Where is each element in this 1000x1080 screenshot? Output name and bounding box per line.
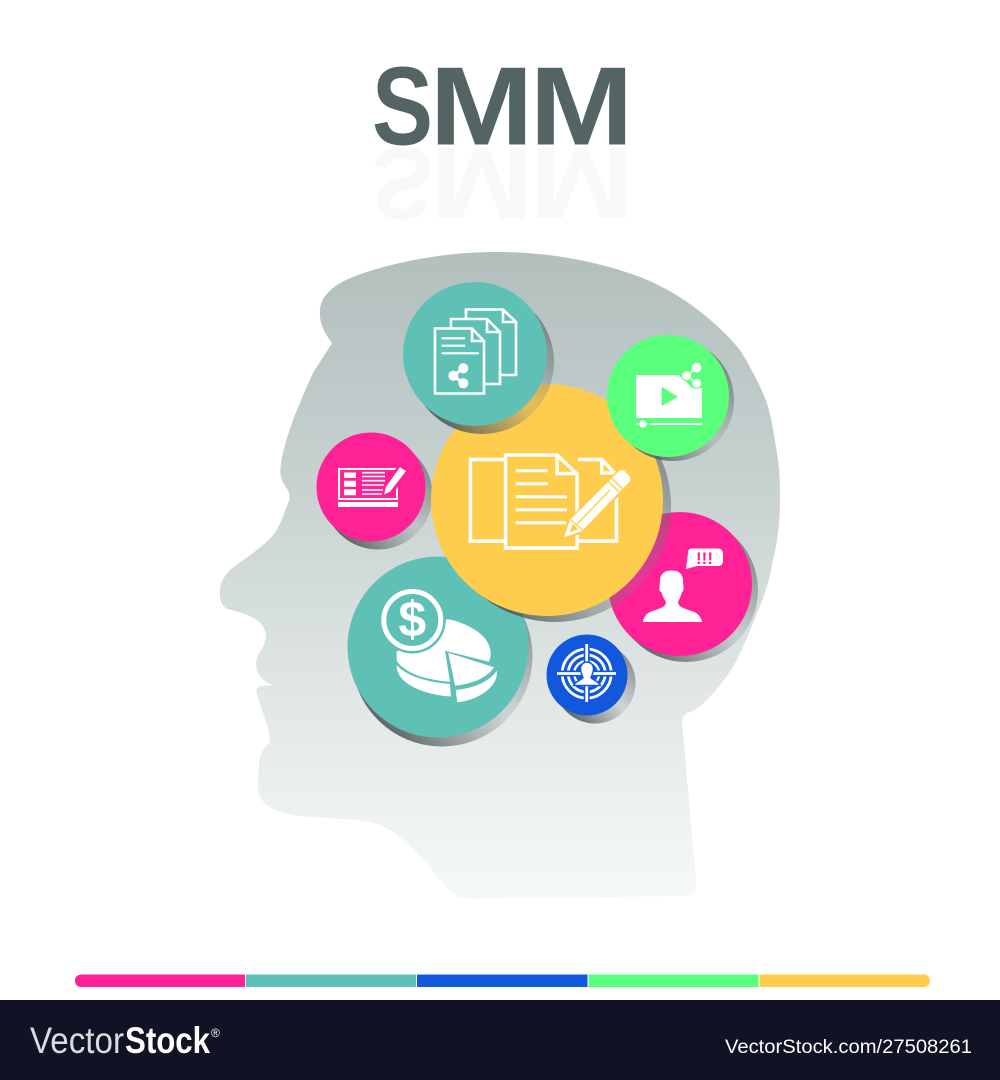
icon: shared documents bbox=[435, 310, 516, 394]
title: S bbox=[372, 44, 433, 168]
icon: laptop with pencil bbox=[338, 464, 410, 507]
circle: teal documents bbox=[403, 282, 554, 434]
circle: blue target bbox=[546, 634, 636, 724]
icon: coin and pie chart bbox=[379, 586, 497, 702]
icon: coin and pie chart: $ bbox=[398, 592, 426, 648]
title reflection: M bbox=[430, 125, 534, 241]
footer band bbox=[0, 1000, 1000, 1080]
icon: pencil bbox=[564, 470, 630, 537]
circle: pink editing bbox=[316, 432, 432, 550]
title: M bbox=[430, 44, 534, 168]
title bbox=[372, 44, 634, 168]
circle: green video bbox=[607, 335, 734, 461]
title reflection: S bbox=[372, 125, 433, 241]
title: M bbox=[530, 44, 634, 168]
head silhouette bbox=[220, 252, 780, 899]
footer logo: Vector bbox=[30, 1020, 124, 1061]
footer logo bbox=[30, 1020, 220, 1061]
circle: teal budget bbox=[348, 556, 532, 746]
footer url: VectorStock.com/27508261 bbox=[725, 1036, 972, 1058]
title reflection bbox=[372, 125, 634, 241]
icon: person with speech bubble: !!! bbox=[696, 549, 713, 568]
circle: pink speech bbox=[608, 512, 758, 662]
title reflection: M bbox=[530, 125, 633, 241]
footer logo: Stock bbox=[125, 1020, 210, 1061]
icon: target audience bbox=[557, 644, 616, 702]
colour bar bbox=[75, 974, 930, 987]
circle: yellow central bbox=[431, 384, 671, 622]
icon: video share bbox=[636, 363, 702, 428]
footer logo: ® bbox=[211, 1026, 220, 1040]
icon: person with speech bubble bbox=[643, 548, 723, 622]
icon: documents and pencil bbox=[470, 455, 630, 548]
